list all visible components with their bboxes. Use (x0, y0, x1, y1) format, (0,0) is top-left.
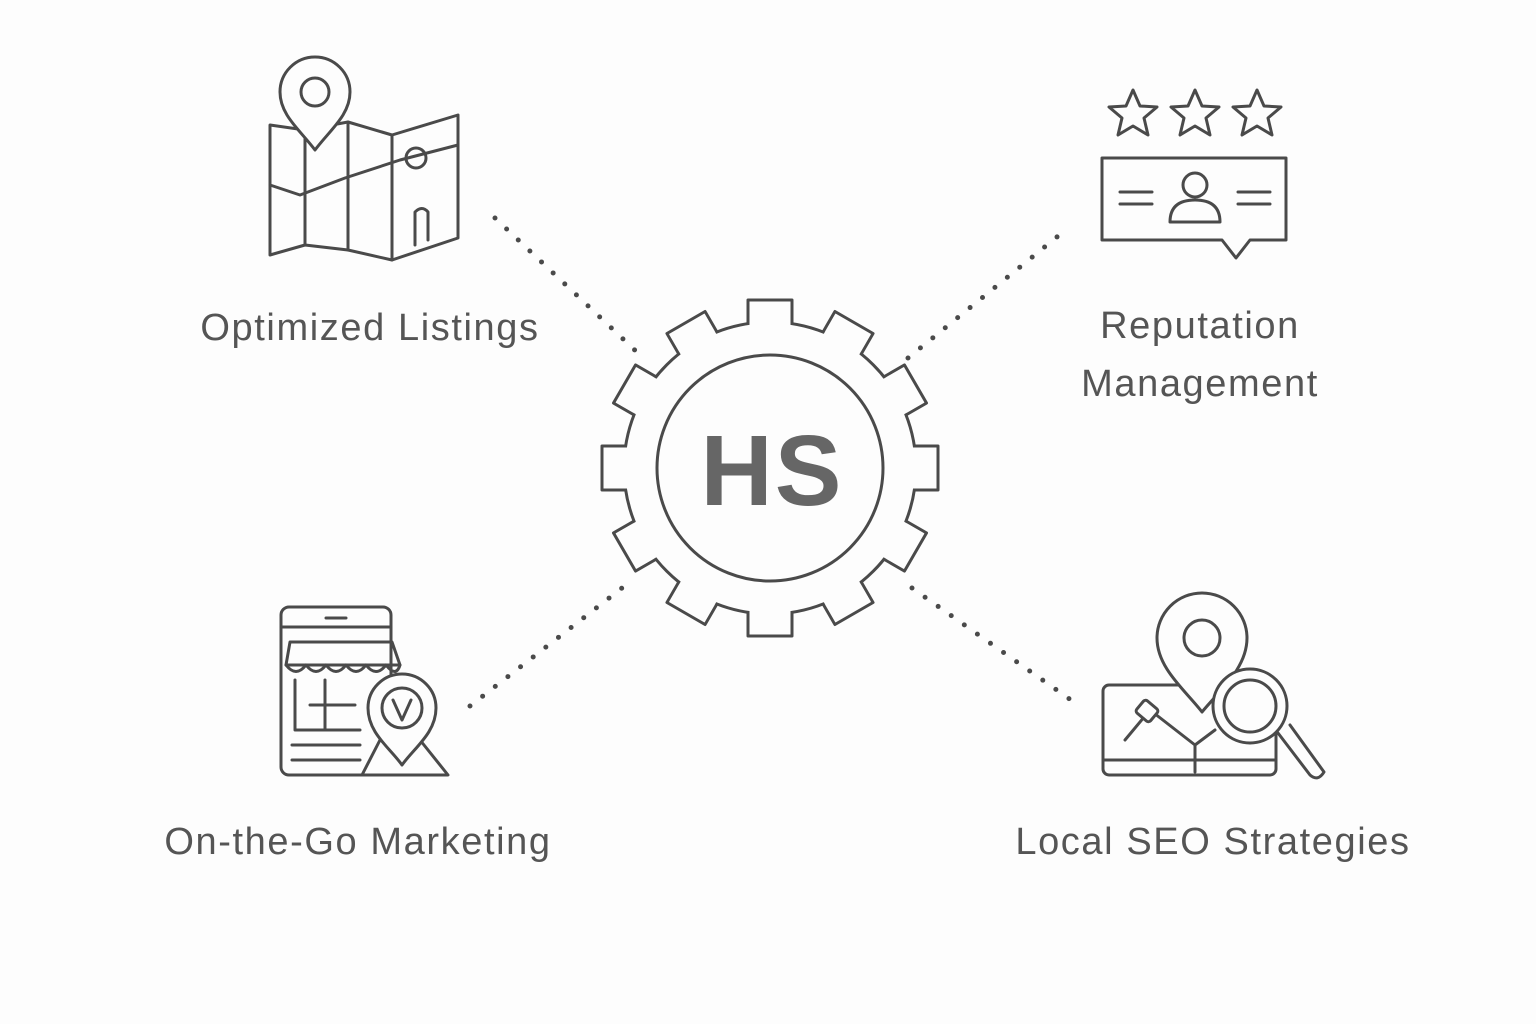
icon: stars and review card (1102, 90, 1286, 258)
icon: mobile storefront with pin (281, 607, 448, 775)
label: Local SEO Strategies: Local SEO Strategies (1015, 821, 1411, 863)
icon: map with pin and magnifier (1103, 593, 1324, 778)
icon: map with pin (270, 57, 458, 260)
label: Optimized Listings: Optimized Listings (200, 307, 540, 349)
dotted connectors (470, 218, 1078, 706)
label: Reputation Management: Reputation (1100, 305, 1300, 347)
gear with HS (602, 300, 938, 636)
label: Reputation Management: Management (1081, 363, 1319, 405)
gear with HS: HS (701, 415, 843, 527)
label: On-the-Go Marketing: On-the-Go Marketing (164, 821, 552, 863)
label: Reputation Management (1081, 305, 1319, 405)
